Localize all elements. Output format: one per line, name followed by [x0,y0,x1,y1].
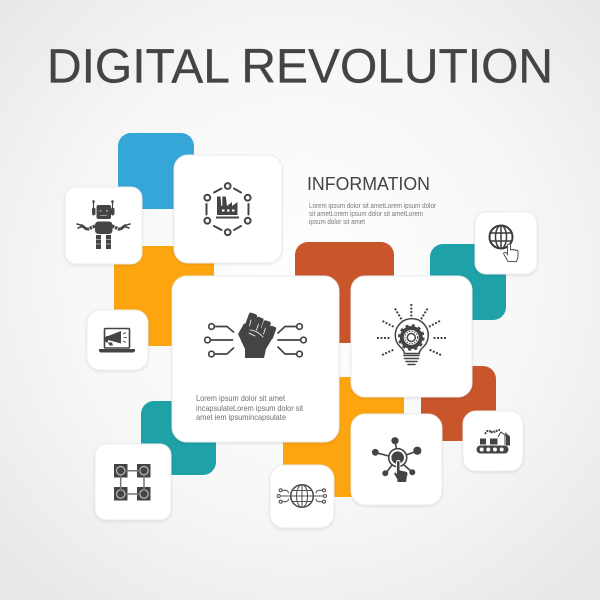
title: DIGITAL REVOLUTION [47,40,553,94]
panel: robot card [65,187,142,264]
panel: teal backdrop upper right [430,244,506,320]
panel: factory card [174,155,282,263]
panel: nodes card [351,414,442,505]
text block: information body: sit ametLorem ipsum dolor sit ametLorem [309,211,423,218]
panel: central fist card [172,276,339,442]
text block: information body [309,203,437,226]
text block: central body: Lorem ipsum dolor sit amet [196,394,286,403]
panel: blue backdrop [118,133,194,209]
panel: orange backdrop lower centre [283,377,404,497]
text block: central body [196,394,304,422]
text block: central body: amet iem ipsumincapsulate [196,413,286,422]
panel: light bulb card [351,276,472,397]
icon: bulb with gear [377,304,446,364]
icon: hand touching network hub [372,437,421,482]
panel: circuit globe card [270,465,334,528]
icon: globe with circuits [277,485,326,507]
icon: conveyor belt [476,430,510,454]
panel: orange backdrop upper left [114,246,214,346]
text block: information body: ipsum dolor sit amet [309,219,365,226]
panel: red backdrop centre [295,242,394,343]
icon: globe with pointer [490,226,518,262]
panel: red backdrop lower right [421,366,496,441]
icon: robot [77,200,130,249]
panel: globe click card [475,212,537,274]
icon: laptop with megaphone [99,328,135,352]
icon: connected factory [204,183,251,235]
text block: information body: Lorem ipsum dolor sit ametLorem ipsum dolor [309,203,437,210]
panel: teal backdrop lower left [141,401,216,475]
icon: raised fist with circuits [205,312,306,358]
panel: blockchain squares card [95,444,171,520]
panel: conveyor card [463,411,523,471]
text block: central body: incapsulateLorem ipsum dolor sit [196,404,304,413]
panel: laptop card [87,310,148,370]
icon: linked square nodes [114,464,150,500]
heading: information: INFORMATION [307,173,430,194]
